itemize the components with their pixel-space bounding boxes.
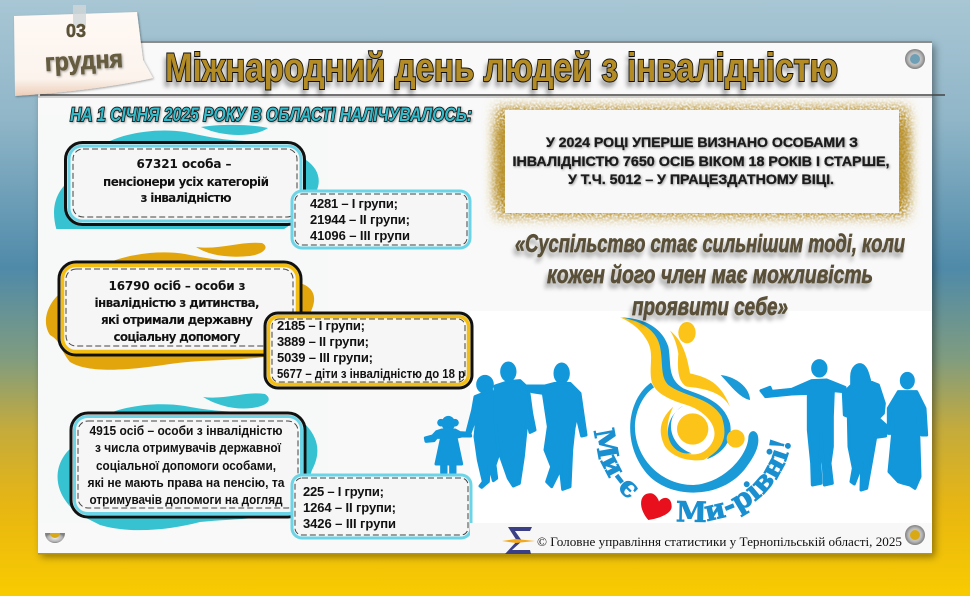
box: pensioners: 67321 особа – <box>136 157 232 171</box>
box: childhood groups <box>265 313 472 388</box>
box: childhood: соціальну допомогу <box>114 330 241 344</box>
silhouettes: left family <box>425 363 586 489</box>
footer source <box>470 523 902 554</box>
box: pension: отримувачів допомоги на догляд <box>90 492 283 507</box>
panel: disabled since childhood <box>46 243 472 388</box>
date note: 03 грудня <box>14 5 153 96</box>
callout: 2024: ІНВАЛІДНІСТЮ 7650 ОСІБ ВІКОМ 18 РОКІВ І СТАРШЕ, <box>512 153 890 169</box>
quote: кожен його член має можливість <box>547 261 873 289</box>
blob: teal <box>54 125 319 240</box>
box: pension: соціальної допомоги особами, <box>96 458 276 473</box>
box: pension: які не мають права на пенсію, та <box>88 475 285 490</box>
subheading: НА 1 СІЧНЯ 2025 РОКУ В ОБЛАСТІ НАЛІЧУВАЛОСЬ: <box>70 105 472 126</box>
quote: проявити себе» <box>632 293 788 321</box>
title: Міжнародний день людей з інвалідністю <box>165 46 838 90</box>
gold spray <box>496 107 908 217</box>
callout: 2024 <box>505 110 899 213</box>
box: childhood groups: 2185 – І групи; <box>277 318 365 333</box>
box 3 groups: 1264 – ІІ групи; <box>303 500 396 515</box>
silhouettes: right family <box>761 361 927 490</box>
box: pensioners groups: 41096 – ІІІ групи <box>310 228 410 243</box>
icon: heart <box>641 493 672 520</box>
box: pension <box>71 413 305 517</box>
box: childhood groups: 5039 – ІІІ групи; <box>277 350 373 365</box>
box: childhood groups: 3889 – ІІ групи; <box>277 334 369 349</box>
box 3 groups: 3426 – ІІІ групи <box>303 516 396 531</box>
box: pension: з числа отримувачів державної <box>95 440 281 455</box>
box: pensioners: пенсіонери усіх категорій <box>103 175 269 189</box>
box: childhood <box>59 262 301 355</box>
box: pensioners groups: 4281 – І групи; <box>310 196 398 211</box>
box: pension: 4915 осіб – особи з інвалідністю <box>90 423 282 438</box>
box: pensioners groups <box>292 191 470 248</box>
box: pensioners <box>66 142 304 224</box>
panel: not entitled to pension <box>58 393 317 530</box>
box: childhood: 16790 осіб – особи з <box>108 279 246 293</box>
box 3 groups <box>292 475 471 538</box>
box: childhood: інвалідністю з дитинства, <box>94 296 260 310</box>
icon: sigma <box>502 527 535 554</box>
logo text: Ми-є Ми-рівні! <box>594 427 791 522</box>
rivets <box>45 49 925 545</box>
panel: pensioners <box>54 125 470 248</box>
date note: 03 грудня: грудня <box>44 45 124 77</box>
box: pensioners: з інвалідністю <box>140 191 232 205</box>
callout: 2024: У Т.Ч. 5012 – У ПРАЦЕЗДАТНОМУ ВІЦІ. <box>568 171 834 187</box>
blob: orange <box>46 243 314 370</box>
blob: teal lower <box>58 393 317 530</box>
quote <box>515 230 905 321</box>
callout: 2024: У 2024 РОЦІ УПЕРШЕ ВИЗНАНО ОСОБАМИ З <box>546 134 858 150</box>
box 3 groups: 225 – І групи; <box>303 484 384 499</box>
box: childhood: які отримали державну <box>101 313 253 327</box>
box: childhood groups: 5677 – діти з інвалідністю до 18 р <box>277 366 465 381</box>
logo: Ми-є Ми-рівні <box>594 317 791 522</box>
date note: 03 грудня: 03 <box>66 21 86 41</box>
footer source: © Головне управління статистики у Тернопільській області, 2025 <box>537 534 902 549</box>
box: pensioners groups: 21944 – ІІ групи; <box>310 212 410 227</box>
